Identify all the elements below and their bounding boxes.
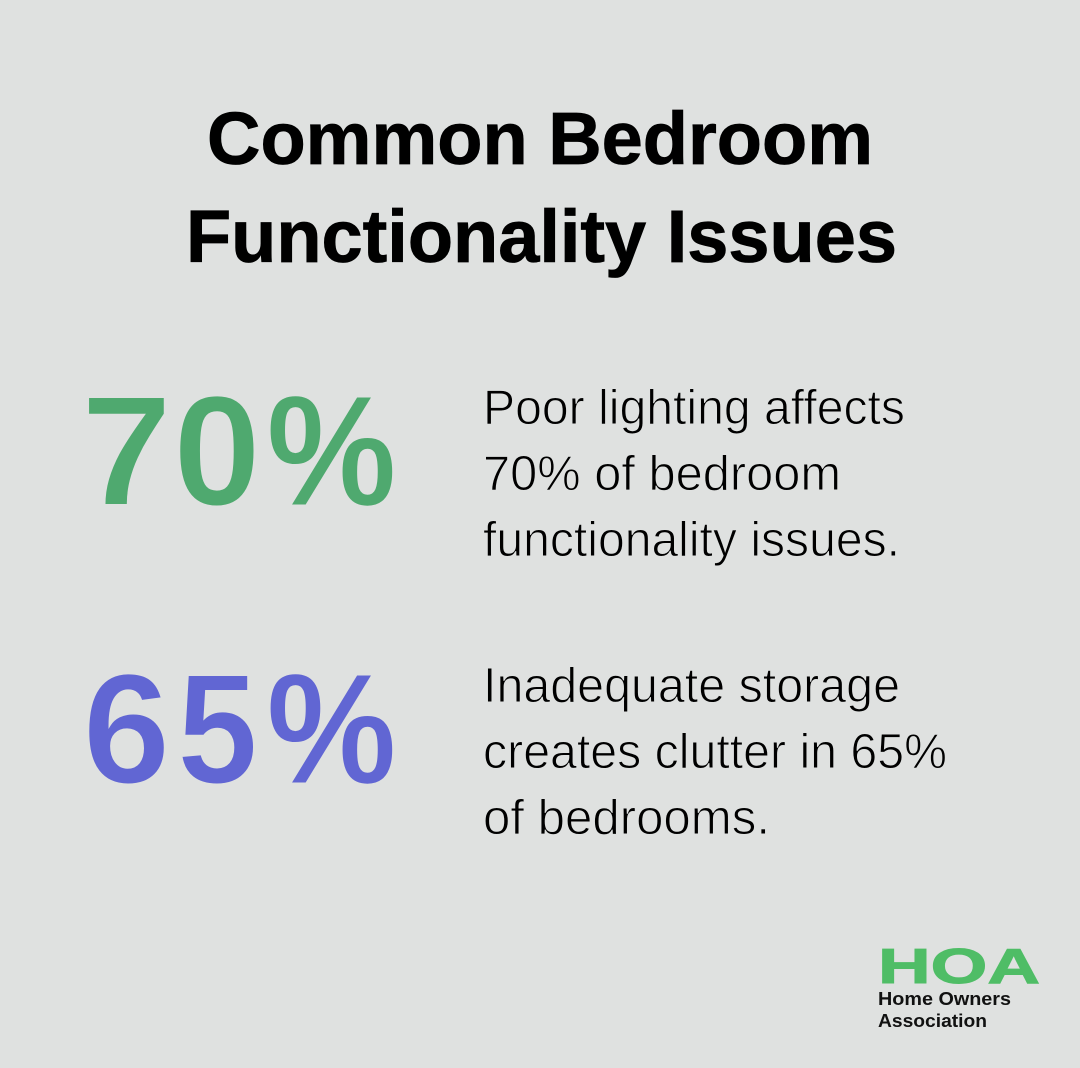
statistic: 70% <box>81 364 396 539</box>
text block: inadequate storage: creates clutter in 65% <box>483 725 947 779</box>
text block: poor lighting: 70% of bedroom <box>483 447 841 501</box>
text block: inadequate storage: of bedrooms. <box>483 791 770 845</box>
statistic: 65%: 6 <box>82 642 170 817</box>
statistic: 65%: 5 <box>177 642 258 817</box>
logo: HOA Home Owners Association: HOA <box>878 940 1040 994</box>
logo: HOA Home Owners Association: Home Owners <box>878 988 1011 1009</box>
logo: HOA Home Owners Association <box>878 940 1040 1031</box>
text block: inadequate storage: Inadequate storage <box>483 659 900 713</box>
text block: inadequate storage <box>483 659 947 845</box>
title: Common Bedroom <box>207 97 873 180</box>
text block: poor lighting: functionality issues. <box>483 513 900 567</box>
title: Functionality Issues <box>186 195 897 278</box>
text block: poor lighting: Poor lighting affects <box>483 381 905 435</box>
statistic: 70%: 7 <box>81 364 172 539</box>
title <box>186 97 897 278</box>
statistic: 70%: % <box>266 364 396 539</box>
statistic: 65% <box>82 642 396 817</box>
logo: HOA Home Owners Association: Association <box>878 1010 987 1031</box>
statistic: 65%: % <box>266 642 396 817</box>
statistic: 70%: 0 <box>173 364 261 539</box>
text block: poor lighting <box>483 381 905 567</box>
